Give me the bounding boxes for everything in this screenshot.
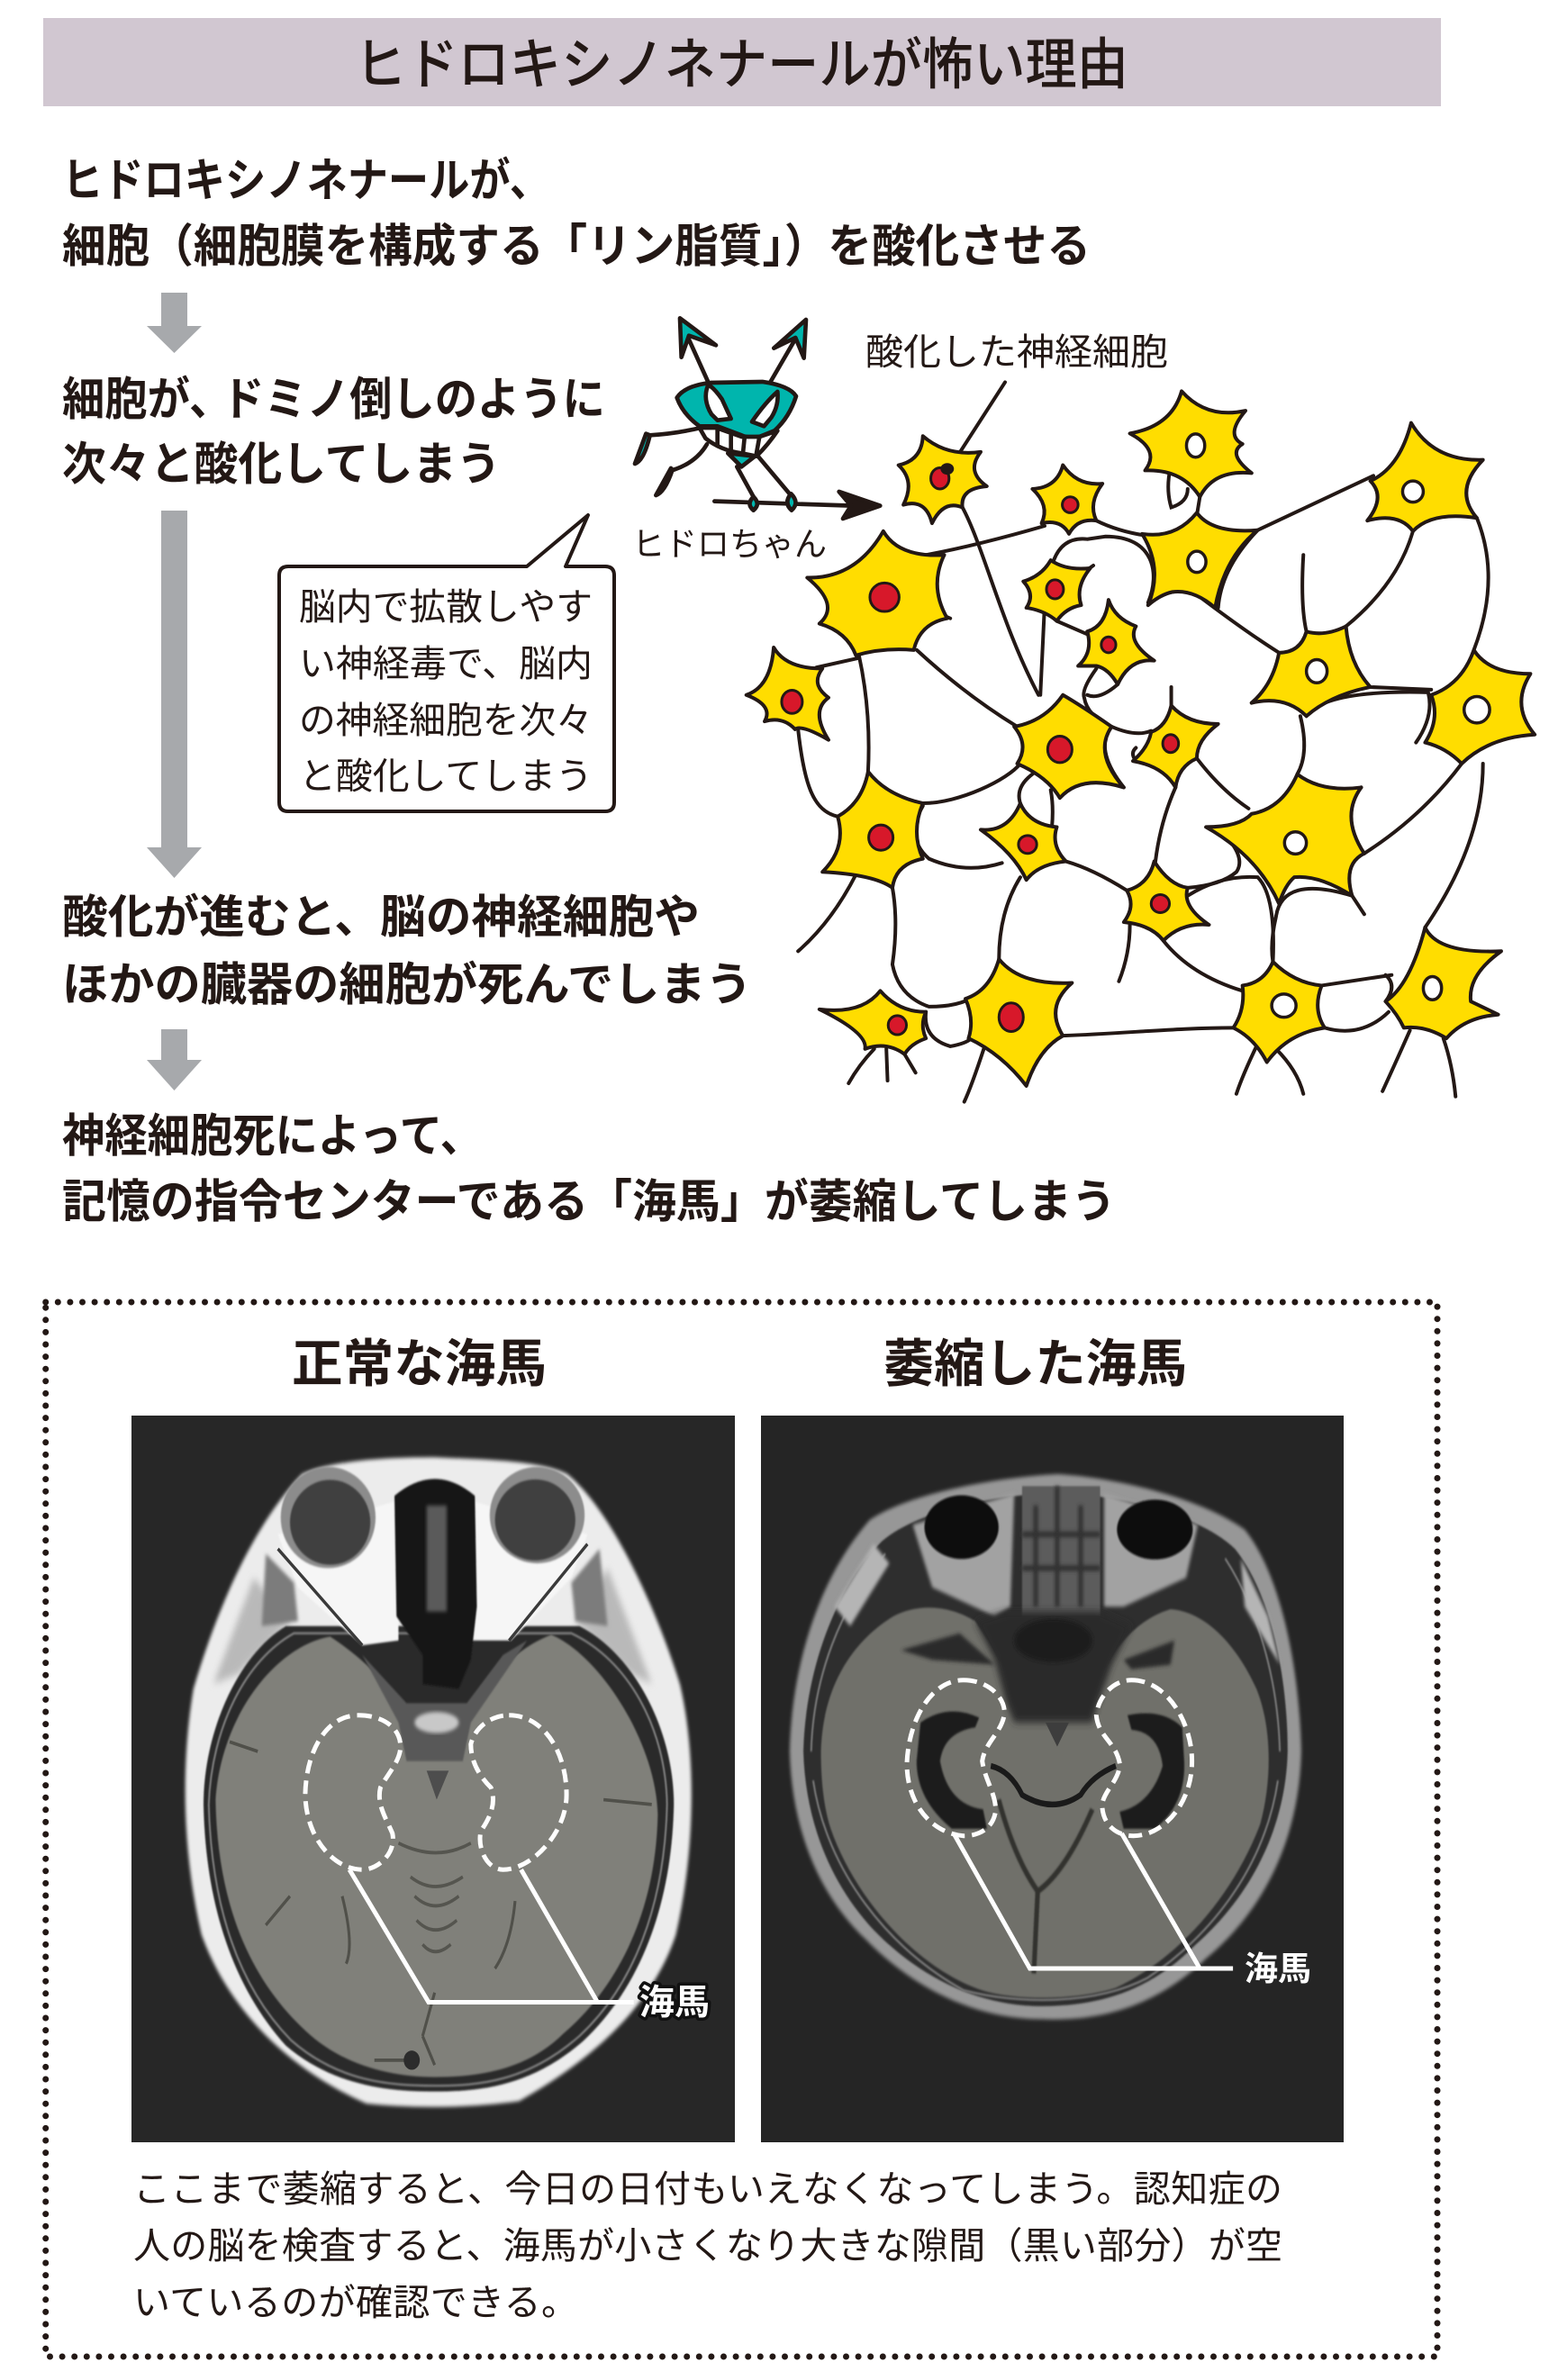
fat behind the eyes	[278, 1500, 398, 1645]
MRI: atrophied brain	[761, 1416, 1344, 2142]
speech bubble: 脳内で拡散しやす	[299, 586, 593, 628]
heading: normal hippocampus: 正常な海馬	[292, 1335, 547, 1393]
arrow: step 2 to 3	[147, 511, 202, 878]
brain	[821, 1607, 1269, 1998]
step 3 text: 酸化が進むと、脳の神経細胞や	[62, 891, 700, 943]
step 3 text: ほかの臓器の細胞が死んでしまう	[62, 959, 752, 1010]
outer scalp	[186, 1457, 692, 2107]
speech bubble: の神経細胞を次々	[299, 700, 593, 741]
hippocampus outlines and leader lines	[907, 1680, 1233, 1968]
caption: ここまで萎縮すると、今日の日付もいえなくなってしまう。認知症の	[133, 2168, 1282, 2210]
label: oxidized neuron: 酸化した神経細胞	[865, 331, 1168, 373]
MRI: normal brain	[131, 1416, 735, 2142]
central dark cisterns	[975, 1612, 1131, 1723]
atrophy voids	[917, 1712, 987, 1829]
speech bubble	[279, 515, 614, 811]
title banner: ヒドロキシノネナールが怖い理由	[355, 34, 1128, 96]
caption: いているのが確認できる。	[133, 2282, 578, 2323]
scalp ring	[790, 1474, 1301, 2020]
step 4 text: 神経細胞死によって、	[62, 1110, 483, 1162]
skull dark ring	[803, 1493, 1288, 2006]
step 2 text: 細胞が、ドミノ倒しのように	[62, 374, 605, 425]
speech bubble: い神経毒で、脳内	[299, 643, 593, 684]
neuron bodies	[747, 391, 1535, 1086]
hippocampus outlines and leader lines	[305, 1715, 634, 2003]
step 3 text	[62, 891, 752, 1010]
brain	[215, 1634, 657, 2077]
step 1 text: 細胞（細胞膜を構成する「リン脂質」）を酸化させる	[62, 221, 1091, 272]
dotted panel: hippocampus comparison	[46, 1302, 1437, 2357]
fat around orbits	[912, 1493, 1014, 1616]
oxidized nuclei (red)	[782, 467, 1179, 1035]
arrow: step 3 to 4	[147, 1029, 202, 1090]
arrow: step 1 to 2	[147, 293, 202, 353]
icon: Hidoro-chan mascot	[635, 318, 880, 519]
healthy nuclei (white)	[1186, 434, 1490, 1018]
caption	[133, 2168, 1282, 2323]
label: Hidoro-chan: ヒドロちゃん	[632, 526, 827, 563]
heading: atrophied hippocampus: 萎縮した海馬	[883, 1335, 1187, 1393]
step 1 text: ヒドロキシノネナールが、	[62, 155, 550, 206]
step 1 text	[62, 155, 1091, 272]
nasal cavity	[394, 1479, 477, 1688]
step 2 text: 次々と酸化してしまう	[62, 439, 501, 490]
label: hippocampus: 海馬	[1245, 1950, 1311, 1987]
speech bubble: と酸化してしまう	[299, 756, 593, 797]
neuron processes	[798, 382, 1489, 1102]
label: hippocampus: 海馬	[639, 1984, 710, 2023]
skull dark ring	[204, 1626, 674, 2092]
mottled tissue at the sides of the head	[213, 1568, 652, 1684]
step 2 text	[62, 374, 605, 490]
ethmoid sinus	[1022, 1486, 1101, 1616]
neuron network illustration	[747, 382, 1535, 1102]
step 4 text	[62, 1110, 1116, 1227]
cerebellar folds and sulci	[398, 1843, 471, 1951]
step 4 text: 記憶の指令センターである「海馬」が萎縮してしまう	[62, 1176, 1116, 1227]
title banner	[43, 18, 1441, 106]
caption: 人の脳を検査すると、海馬が小さくなり大きな隙間（黒い部分）が空	[133, 2225, 1282, 2267]
